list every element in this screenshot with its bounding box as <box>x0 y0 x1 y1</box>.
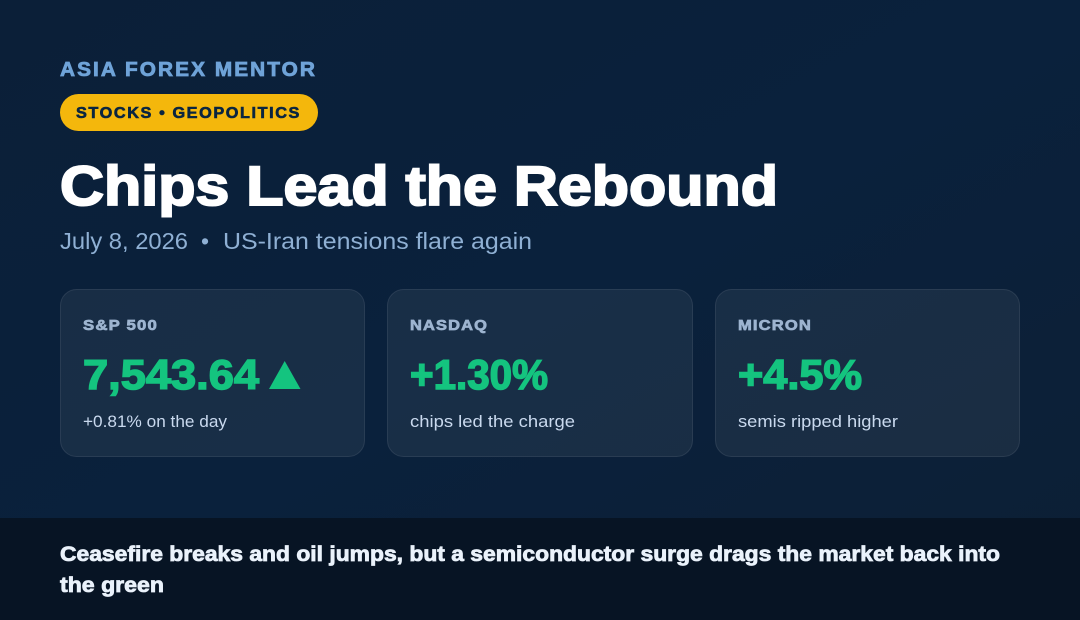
brand label: ASIA FOREX MENTOR <box>60 59 317 81</box>
value: 7,543.64: 7,543.64 <box>83 351 260 398</box>
footer headline: Ceasefire breaks and oil jumps, but a semiconductor surge drags the market back into <box>60 542 1000 566</box>
panel: Nasdaq <box>388 290 692 456</box>
note: day change: +0.81% on the day <box>83 413 228 431</box>
note: chips: chips led the charge <box>410 413 575 431</box>
value: +1.30%: +1.30% <box>410 351 548 398</box>
panel: Micron <box>716 290 1020 456</box>
subtitle: • <box>201 228 209 254</box>
category pill <box>60 94 318 131</box>
label: Nasdaq: NASDAQ <box>410 318 488 334</box>
panel: S&P 500 <box>60 290 364 456</box>
subtitle <box>60 228 532 254</box>
title: Chips Lead the Rebound <box>60 154 778 217</box>
note: semis: semis ripped higher <box>738 413 899 431</box>
subtitle: US-Iran tensions flare again <box>223 228 532 254</box>
label: S&P 500: S&P 500 <box>83 318 158 334</box>
footer headline: the green <box>60 573 164 597</box>
category pill: STOCKS • GEOPOLITICS <box>76 105 301 122</box>
footer band <box>0 518 1080 620</box>
label: Micron: MICRON <box>738 318 812 334</box>
subtitle: July 8, 2026 <box>60 228 188 254</box>
icon: up triangle <box>269 361 300 389</box>
value: +4.5%: +4.5% <box>738 351 862 398</box>
